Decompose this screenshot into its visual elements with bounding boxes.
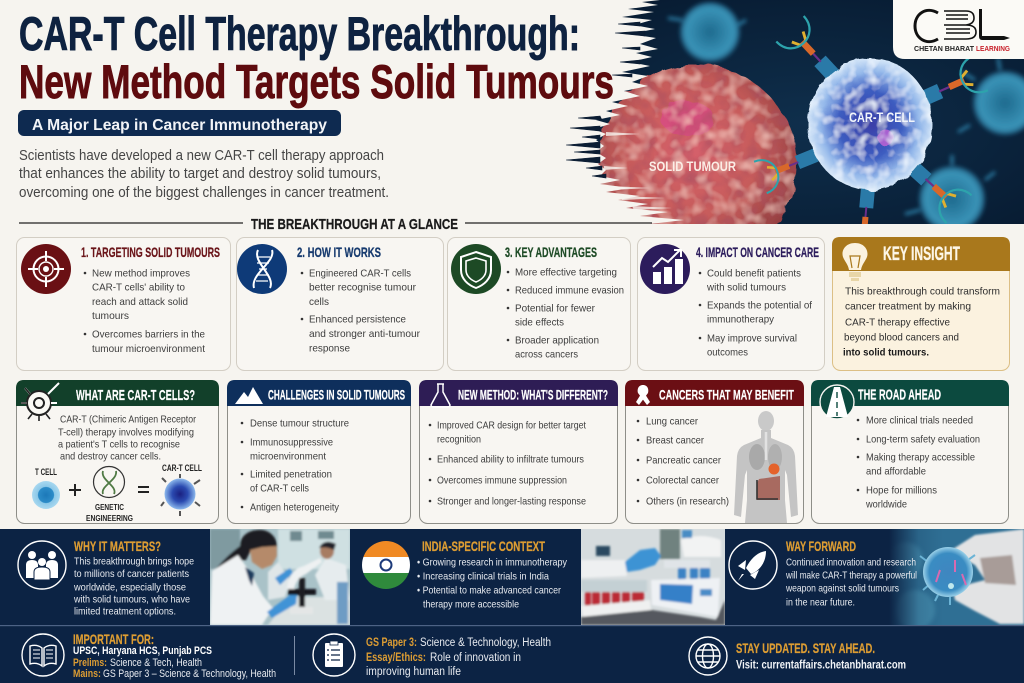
- human body illustration: [734, 411, 798, 523]
- icon: clipboard: [313, 634, 355, 676]
- insight text: CAR-T therapy effective: [845, 316, 950, 328]
- text: [73, 556, 194, 618]
- logo: [893, 0, 1024, 59]
- description: and destroy cancer cells.: [60, 450, 161, 462]
- bullets: Long-term safety evaluation: [866, 434, 980, 446]
- heading: STAY UPDATED. STAY AHEAD.: [736, 640, 875, 656]
- insight text: This breakthrough could transform: [845, 286, 1000, 298]
- intro text: Scientists have developed a new CAR-T cell therapy approach: [19, 148, 384, 164]
- bullets: Lung cancer: [646, 416, 698, 428]
- text: [785, 556, 917, 608]
- text: in the near future.: [786, 596, 855, 608]
- bullets: [241, 418, 349, 514]
- mains: GS Paper 3 – Science & Technology, Health: [103, 668, 276, 680]
- GS paper line: [366, 637, 551, 649]
- insight heading: KEY INSIGHT: [883, 244, 960, 265]
- title line 1: CAR-T Cell Therapy Breakthrough:: [19, 7, 580, 60]
- logo C: [915, 10, 938, 42]
- T cell: T CELL: [35, 467, 57, 477]
- bullets: Overcomes immune suppression: [437, 474, 567, 486]
- icon: T cell with receptors: [21, 383, 59, 421]
- bullets: and affordable: [866, 466, 926, 478]
- icon: flask: [431, 384, 450, 407]
- hero image: tumour and CAR-T cell: [596, 0, 1024, 224]
- bullets: [857, 414, 980, 510]
- panel: new method: [419, 380, 618, 524]
- subtitle pill: A Major Leap in Cancer Immunotherapy: [32, 117, 327, 134]
- essay line: [366, 652, 521, 664]
- text: therapy more accessible: [423, 598, 519, 610]
- section heading: THE BREAKTHROUGH AT A GLANCE: [251, 216, 458, 233]
- header bar: [419, 380, 618, 406]
- panel: what are CAR-T cells: [16, 380, 219, 524]
- bullets: with solid tumours: [706, 282, 786, 294]
- divider line: [0, 625, 1024, 626]
- bullets: Overcomes barriers in the: [92, 328, 205, 340]
- bullets: reach and attack solid: [92, 296, 188, 308]
- bullets: Improved CAR design for better target: [437, 420, 586, 432]
- table: [268, 597, 350, 625]
- bullets: [699, 268, 812, 358]
- intro text: [19, 148, 389, 201]
- bullets: side effects: [515, 316, 564, 328]
- GS paper line: Science & Technology, Health: [420, 637, 551, 649]
- bullets: Breast cancer: [646, 434, 704, 446]
- heading: CANCERS THAT MAY BENEFIT: [659, 386, 794, 402]
- exams: UPSC, Haryana HCS, Punjab PCS: [73, 645, 212, 657]
- bullets: immunotherapy: [707, 314, 775, 326]
- machine: [651, 578, 720, 617]
- middle person: [268, 562, 290, 600]
- torn edge dark streaks: [566, 22, 645, 178]
- subtitle pill: [18, 110, 341, 136]
- bullets: and stronger anti-tumour: [309, 328, 420, 340]
- bullets: May improve survival: [707, 332, 797, 344]
- heading: WHY IT MATTERS?: [74, 538, 161, 554]
- heading: WHAT ARE CAR-T CELLS?: [76, 387, 195, 404]
- bullets: of CAR-T cells: [250, 482, 309, 494]
- equals sign: [138, 487, 149, 492]
- text: limited treatment options.: [74, 606, 176, 618]
- background cell bottom: [905, 155, 995, 232]
- text: • Growing research in immunotherapy: [417, 556, 568, 568]
- man: [315, 558, 350, 600]
- prelims: Science & Tech, Health: [110, 657, 202, 669]
- essay line: Role of innovation in: [430, 652, 521, 664]
- solid tumour: [598, 63, 797, 224]
- icon: rocket: [729, 541, 777, 589]
- bottle: [337, 582, 348, 624]
- why it matters: [18, 538, 194, 618]
- bottom band: [0, 529, 1024, 683]
- vials: [678, 568, 710, 580]
- T cell: [32, 467, 60, 509]
- title line 2: New Method Targets Solid Tumours: [19, 55, 614, 108]
- icon: globe: [689, 637, 727, 675]
- photo: lab equipment with test tubes: [581, 529, 725, 625]
- bullets: CAR-T cells' ability to: [92, 282, 185, 294]
- vertical divider: [294, 636, 296, 675]
- text: Continued innovation and research: [786, 556, 916, 568]
- torn edge paper streaks over tumour: [604, 132, 672, 210]
- heading: 2. HOW IT WORKS: [297, 244, 381, 260]
- bullets: Potential for fewer: [515, 302, 595, 314]
- glove: [950, 529, 1024, 624]
- icon: road: [820, 385, 854, 419]
- icon: target: [21, 244, 71, 294]
- bullets: response: [309, 342, 350, 354]
- way forward: [729, 538, 917, 608]
- icon: shield: [451, 244, 501, 294]
- bullets: More clinical trials needed: [866, 414, 973, 426]
- panel: challenges: [227, 380, 411, 524]
- description: T-cell) therapy involves modifying: [58, 426, 194, 438]
- description: CAR-T (Chimeric Antigen Receptor: [60, 414, 196, 426]
- bullets: Making therapy accessible: [866, 452, 975, 464]
- insight header: [832, 237, 1010, 271]
- heading: THE ROAD AHEAD: [858, 386, 941, 404]
- bullets: Others (in research): [646, 496, 729, 508]
- title: [19, 7, 614, 108]
- hair: [215, 530, 277, 570]
- glove: [625, 548, 661, 572]
- heading: INDIA-SPECIFIC CONTEXT: [422, 538, 545, 554]
- text: weapon against solid tumours: [785, 582, 899, 594]
- text: [417, 556, 568, 610]
- GS paper line: GS Paper 3:: [366, 637, 417, 649]
- panel: targeting solid tumours: [16, 238, 230, 370]
- bullets: Limited penetration: [250, 468, 332, 480]
- essay line: Essay/Ethics:: [366, 652, 426, 664]
- text: with solid tumours, who have: [73, 594, 190, 606]
- CAR-T cell: [808, 58, 932, 190]
- receptors: [754, 15, 988, 224]
- description: [58, 414, 196, 462]
- heading: CHALLENGES IN SOLID TUMOURS: [268, 386, 405, 402]
- text: to millions of cancer patients: [74, 568, 189, 580]
- header bar: [811, 380, 1009, 406]
- CAR-T cell: CAR-T CELL: [162, 463, 202, 473]
- gloves: [267, 594, 297, 618]
- icon: mountains: [235, 387, 263, 404]
- bullets: outcomes: [707, 346, 748, 358]
- logo B books: [944, 11, 976, 39]
- intro text: overcoming one of the biggest challenges in cancer treatment.: [19, 185, 389, 201]
- background cell top: [668, 2, 746, 62]
- insight text: into solid tumours.: [843, 346, 929, 358]
- header bar: [16, 380, 219, 406]
- bullets: Colorectal cancer: [646, 474, 719, 486]
- face: [250, 546, 277, 569]
- bullets: [637, 416, 729, 508]
- panel: the road ahead: [811, 380, 1009, 524]
- stay updated: [689, 637, 906, 675]
- heading: 3. KEY ADVANTAGES: [505, 244, 597, 260]
- bullets: Hope for millions: [866, 484, 937, 496]
- insight text: [843, 286, 1000, 358]
- intro text: that enhances the ability to target and destroy solid tumours,: [19, 166, 381, 182]
- description: a patient's T cells to recognise: [58, 438, 180, 450]
- bullets: cells: [309, 296, 329, 308]
- label: CAR-T cell: CAR-T CELL: [849, 109, 915, 125]
- mains: Mains:: [73, 668, 101, 680]
- bullets: Antigen heterogeneity: [250, 502, 340, 514]
- important for: [22, 631, 276, 680]
- bullets: New method improves: [92, 268, 190, 280]
- logo L pencil: [979, 9, 1010, 40]
- text: will make CAR-T therapy a powerful: [785, 570, 917, 582]
- bench: [581, 600, 725, 625]
- panel: how it works: [236, 238, 444, 370]
- heading: NEW METHOD: WHAT'S DIFFERENT?: [458, 386, 608, 402]
- bullets: [507, 266, 624, 360]
- logo wordmark: [914, 46, 1011, 53]
- bullets: Immunosuppressive: [250, 436, 333, 448]
- heading: 1. TARGETING SOLID TUMOURS: [81, 244, 220, 260]
- icon: growth chart: [640, 244, 690, 294]
- icon: open book: [22, 634, 64, 676]
- bullets: Enhanced persistence: [309, 314, 406, 326]
- sleeve: [581, 560, 627, 578]
- bullets: across cancers: [515, 348, 578, 360]
- icon: DNA: [237, 244, 287, 294]
- website: Visit: currentaffairs.chetanbharat.com: [736, 658, 906, 672]
- bullets: microenvironment: [250, 450, 326, 462]
- header bar: [625, 380, 804, 406]
- dark background: [596, 0, 1024, 224]
- text: • Increasing clinical trials in India: [417, 570, 549, 582]
- panel: key insight: [832, 237, 1010, 370]
- panel: impact on cancer care: [638, 238, 824, 370]
- genetic engineering: GENETIC: [95, 502, 124, 512]
- genetic engineering: [86, 466, 133, 523]
- panel: key advantages: [448, 238, 630, 370]
- header bar: [227, 380, 411, 406]
- icon: Indian flag: [362, 541, 410, 589]
- bullets: Broader application: [515, 334, 599, 346]
- bullets: worldwide: [865, 498, 907, 510]
- genetic engineering: ENGINEERING: [86, 513, 133, 523]
- heading: IMPORTANT FOR:: [73, 631, 154, 647]
- CAR-T cell: [161, 463, 202, 516]
- insight text: cancer treatment by making: [845, 300, 971, 312]
- text: worldwide, especially those: [73, 582, 186, 594]
- insight text: beyond blood cancers and: [844, 332, 959, 344]
- tubes: [581, 580, 647, 592]
- virus: [920, 547, 975, 605]
- prelims: Prelims:: [73, 657, 107, 669]
- coat: [210, 555, 273, 625]
- microscope: [287, 558, 322, 590]
- bullets: Expands the potential of: [707, 300, 812, 312]
- background cell right: [958, 58, 1024, 135]
- GS paper and essay: [313, 634, 551, 678]
- panel: cancers that may benefit: [625, 380, 804, 524]
- photo: scientist at microscope: [210, 529, 350, 625]
- text: This breakthrough brings hope: [74, 556, 194, 568]
- diagram: T cell + engineering = CAR-T cell: [32, 463, 202, 523]
- bullets: Engineered CAR-T cells: [309, 268, 411, 280]
- bullets: Reduced immune evasion: [515, 284, 624, 296]
- icon: ribbon: [636, 385, 650, 405]
- icon: light bulb: [842, 243, 868, 281]
- India-specific context: [362, 538, 568, 610]
- photo: gloved hand holding cell: [887, 529, 1024, 630]
- bullets: Pancreatic cancer: [646, 454, 721, 466]
- bullets: [84, 268, 205, 355]
- text: • Potential to make advanced cancer: [417, 584, 561, 596]
- prelims: [73, 657, 202, 669]
- heading: WAY FORWARD: [786, 538, 856, 554]
- bullets: tumour microenvironment: [92, 343, 205, 355]
- essay line 2: improving human life: [366, 666, 461, 678]
- bullets: recognition: [437, 434, 481, 446]
- bullets: Dense tumour structure: [250, 418, 349, 430]
- bullets: tumours: [92, 310, 129, 322]
- bullets: Enhanced ability to infiltrate tumours: [437, 454, 584, 466]
- heading: 4. IMPACT ON CANCER CARE: [696, 244, 819, 260]
- logo wordmark: LEARNING: [976, 46, 1011, 53]
- plus sign: [69, 484, 81, 496]
- logo wordmark: CHETAN BHARAT: [914, 46, 975, 53]
- bullets: [429, 420, 586, 508]
- bullets: Stronger and longer-lasting response: [437, 496, 586, 508]
- bullets: better recognise tumour: [309, 282, 416, 294]
- torn paper edge: [540, 0, 684, 224]
- bullets: Could benefit patients: [707, 268, 801, 280]
- bullets: [301, 268, 420, 354]
- label: solid tumour: SOLID TUMOUR: [649, 158, 736, 174]
- icon: people: [18, 541, 66, 589]
- tray: [581, 600, 651, 617]
- bullets: More effective targeting: [515, 266, 617, 278]
